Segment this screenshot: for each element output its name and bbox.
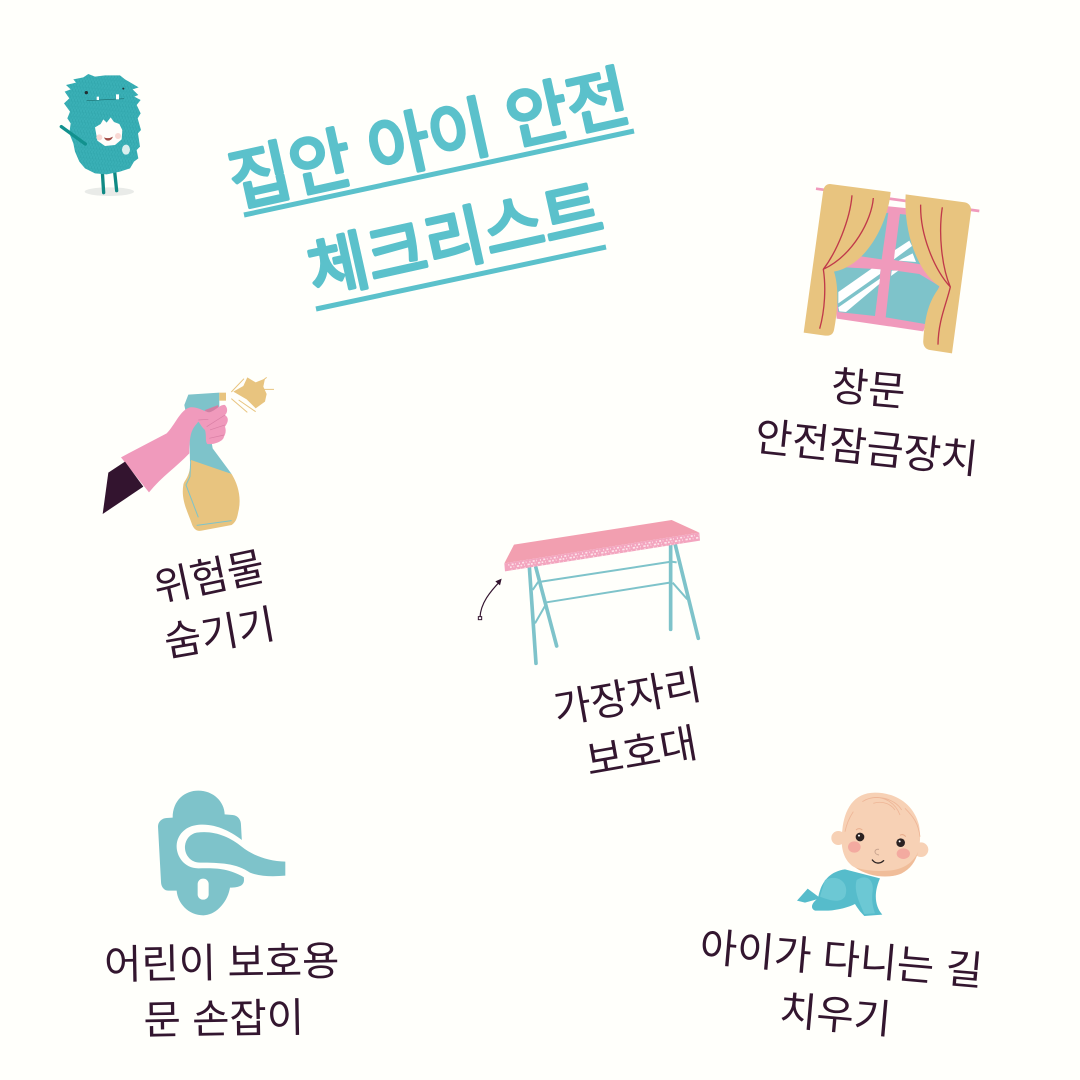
label: edge guards: 보호대	[582, 720, 701, 785]
title	[222, 59, 636, 309]
label: edge guards: 가장자리	[550, 662, 705, 733]
icon: table with pink edge	[478, 520, 700, 663]
label: child-safe door handle: 어린이 보호용	[104, 938, 340, 988]
label: edge guards	[550, 662, 705, 785]
icon: furry teal monster	[61, 74, 141, 196]
label: hide hazards	[150, 543, 279, 666]
label: child-safe door handle: 문 손잡이	[143, 995, 304, 1043]
label: window lock: 창문	[829, 363, 907, 415]
icon: window with curtains	[804, 184, 979, 353]
title: 체크리스트	[301, 172, 609, 308]
label: hide hazards: 숨기기	[160, 601, 279, 666]
label: child-safe door handle	[104, 938, 340, 1043]
label: clear the child's path: 치우기	[777, 987, 893, 1043]
label: window lock	[753, 363, 980, 483]
label: clear the child's path	[698, 924, 985, 1043]
icon: hand with spray bottle	[103, 377, 274, 531]
icon: crawling baby	[797, 793, 928, 916]
icon: child safety door handle	[158, 791, 288, 915]
title: 집안 아이 안전	[222, 59, 636, 221]
label: window lock: 안전잠금장치	[753, 413, 980, 483]
label: clear the child's path: 아이가 다니는 길	[698, 924, 985, 994]
label: hide hazards: 위험물	[150, 543, 269, 611]
